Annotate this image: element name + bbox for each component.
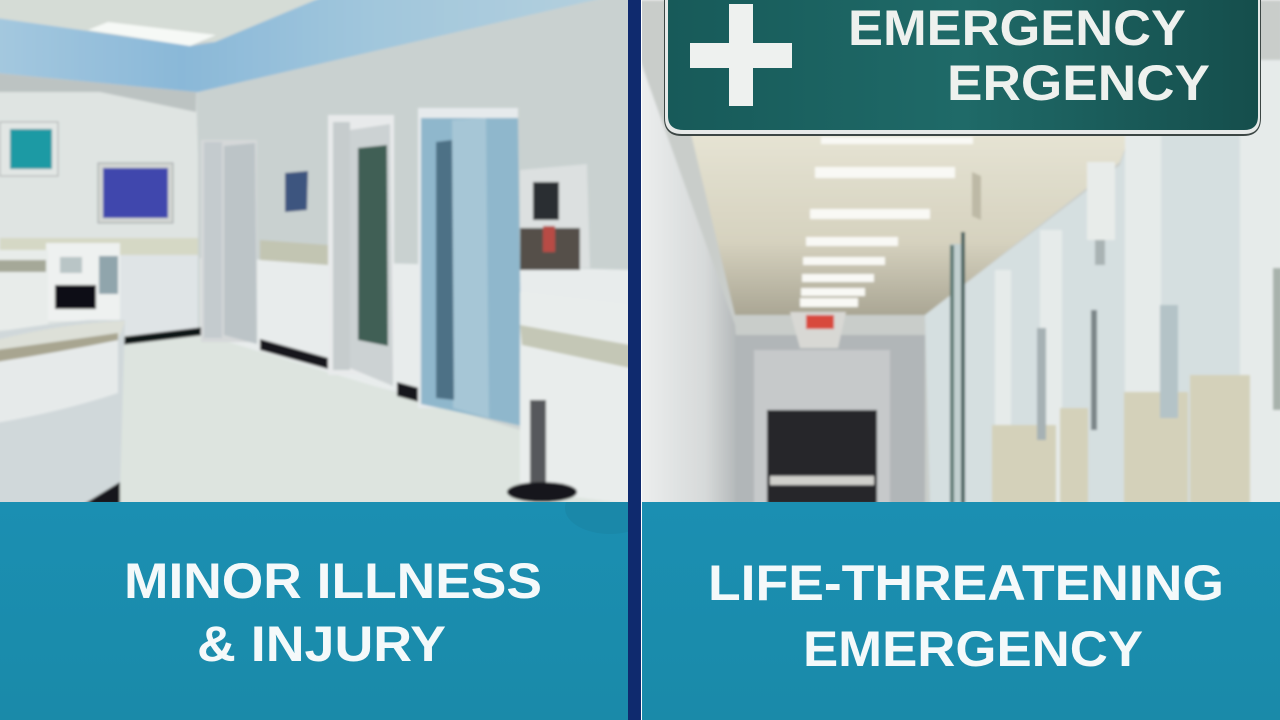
reception desk (0, 320, 125, 504)
right counter (520, 292, 630, 504)
left corridor wall (642, 64, 736, 502)
caption band: minor illness and injury (0, 502, 628, 720)
icon: medical cross (690, 4, 792, 106)
back wall (0, 73, 204, 340)
double doors (767, 410, 877, 504)
door 2 (327, 114, 395, 264)
door 1 (201, 140, 257, 342)
emergency sign (664, 0, 1261, 136)
center divider (628, 0, 641, 720)
wall stripes (995, 60, 1280, 504)
caption band: life-threatening emergency (642, 502, 1280, 720)
corridor ceiling (690, 130, 1132, 315)
sign text: ERGENCY (947, 55, 1210, 111)
panel: minor illness clinic photo (0, 0, 630, 504)
right corridor wall (924, 136, 1240, 502)
wall sign logo (0, 122, 58, 176)
wall panels beige (992, 375, 1250, 504)
sign text: EMERGENCY (848, 0, 1186, 56)
ceiling (0, 0, 612, 92)
ceiling lights (800, 137, 973, 307)
blue poster (98, 163, 173, 223)
small poster (285, 171, 308, 212)
panel: emergency corridor photo (640, 0, 1280, 504)
caption band: life-threatening emergency: EMERGENCY (803, 621, 1143, 677)
caption band: life-threatening emergency: LIFE-THREATENING (708, 555, 1224, 611)
door 3 blue (418, 108, 518, 408)
caption band: minor illness and injury: MINOR ILLNESS (124, 553, 542, 609)
end of corridor (735, 335, 925, 504)
reception equipment (46, 243, 120, 321)
wall box (1087, 162, 1115, 240)
stanchion post (530, 400, 546, 485)
floor (120, 335, 630, 504)
caption band: minor illness and injury: & INJURY (197, 616, 446, 672)
glass door lines (952, 244, 962, 502)
sign text (848, 0, 1210, 111)
right wall (198, 0, 630, 330)
exit sign (790, 312, 846, 348)
wall dispenser (520, 164, 590, 268)
